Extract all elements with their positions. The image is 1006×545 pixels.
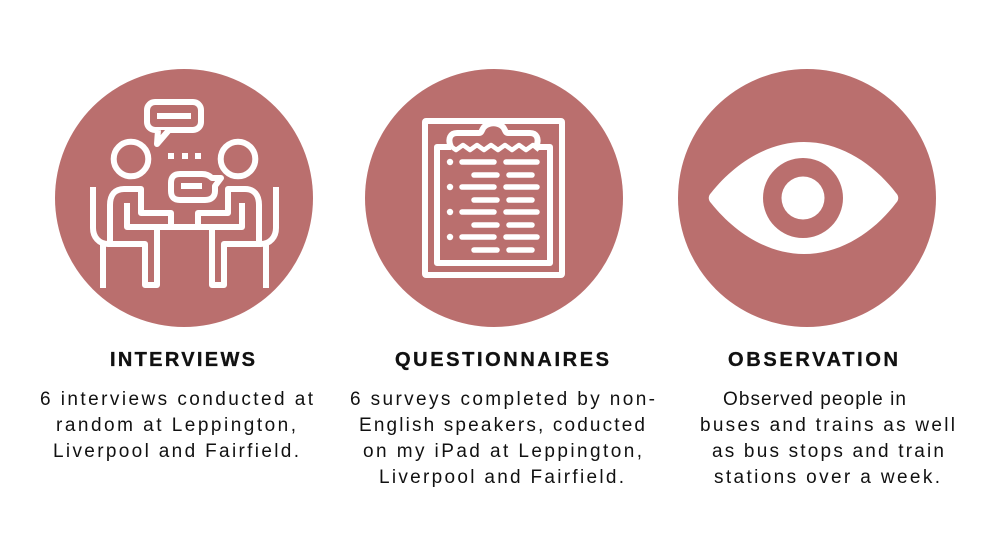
text block: questionnaires description: on my iPad at Leppington, [363, 441, 642, 462]
icon: two people talking at a table [93, 102, 276, 288]
text block: interviews description [40, 389, 314, 462]
text block: interviews description: 6 interviews conducted at [40, 389, 314, 410]
text block: questionnaires description: Liverpool and Fairfield. [379, 467, 624, 488]
heading: observation: OBSERVATION [728, 349, 898, 371]
text block: questionnaires description [350, 389, 655, 488]
text block: observation description: as bus stops and train [712, 441, 944, 462]
icon: interview circle background [55, 69, 313, 327]
icon: questionnaire circle background [365, 69, 623, 327]
heading: questionnaires: QUESTIONNAIRES [395, 349, 609, 371]
panel: observation [678, 69, 955, 488]
text block: questionnaires description: 6 surveys completed by non- [350, 389, 655, 410]
panel: questionnaires [350, 69, 655, 488]
text block: questionnaires description: English speakers, coducted [359, 415, 645, 436]
panel: interviews [40, 69, 314, 462]
text block: interviews description: Liverpool and Fairfield. [53, 441, 299, 462]
text block: observation description [700, 389, 955, 488]
icon: eye [709, 142, 898, 254]
heading: interviews: INTERVIEWS [110, 349, 255, 371]
text block: observation description: buses and trains as well [700, 415, 955, 436]
icon: clipboard with checklist [425, 121, 562, 275]
icon: observation circle background [678, 69, 936, 327]
text block: interviews description: random at Leppington, [56, 415, 296, 436]
text block: observation description: stations over a week. [714, 467, 940, 488]
text block: observation description: Observed people in [723, 389, 906, 410]
